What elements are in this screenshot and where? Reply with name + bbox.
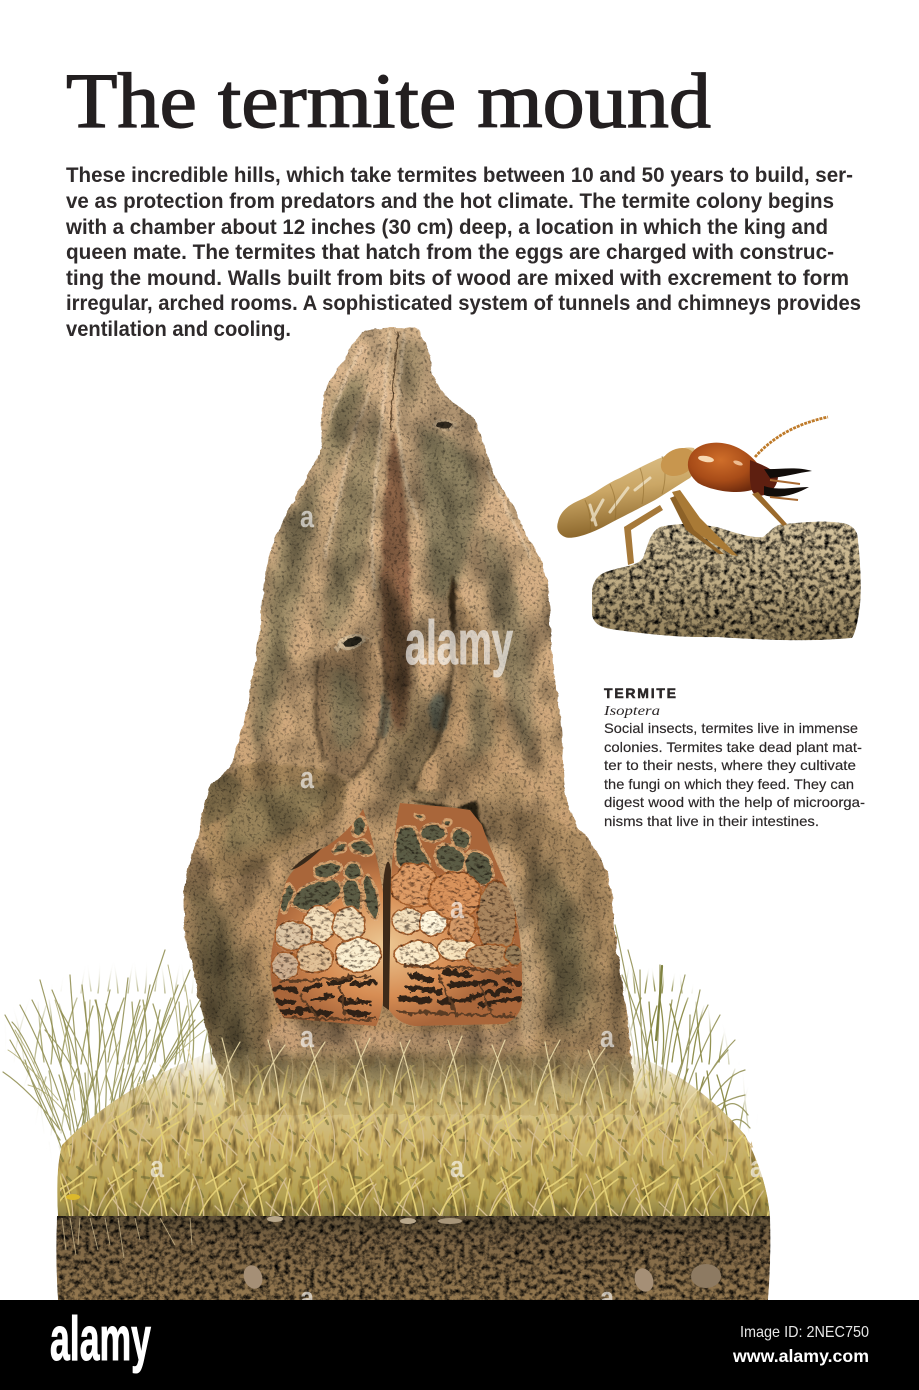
ridge highlights: [324, 331, 530, 590]
upper fungus cells: [278, 814, 499, 921]
stones: [240, 1216, 721, 1294]
thorax: [656, 443, 700, 481]
abdomen: [557, 447, 697, 538]
stock watermarks: a: [300, 1280, 315, 1315]
front leg: [752, 492, 787, 526]
middle cream cells: [271, 863, 523, 980]
palps: [770, 480, 800, 500]
site url: www.alamy.com: [732, 1346, 869, 1366]
alamy logo: alamy: [50, 1305, 151, 1374]
termite caption: digest wood with the help of microorga-: [604, 794, 865, 810]
intro paragraph: These incredible hills, which take termites between 10 and 50 years to build, ser-: [66, 163, 853, 187]
title: The termite mound: [66, 57, 711, 144]
termite illustration: [557, 417, 861, 640]
chamber gap: [291, 848, 322, 870]
intro paragraph: with a chamber about 12 inches (30 cm) deep, a location in which the king and: [65, 215, 828, 239]
termite caption: nisms that live in their intestines.: [604, 813, 819, 829]
mound body: [170, 320, 650, 1120]
chimney columns: [317, 419, 529, 818]
termite caption: Social insects, termites live in immense: [604, 720, 858, 736]
stock watermarks: a: [300, 1019, 315, 1054]
cross-section of nest chambers: [270, 803, 522, 1026]
termite caption: the fungi on which they feed. They can: [604, 776, 854, 792]
central valley: [381, 430, 411, 730]
green-grey mottling: [374, 694, 390, 738]
intro paragraph: [65, 163, 861, 341]
stock watermarks: a: [450, 1149, 465, 1184]
black slit: [449, 575, 457, 632]
grass blades: [60, 1055, 770, 1217]
jaw base: [750, 460, 778, 496]
antenna: [755, 417, 828, 457]
termite mound: [170, 320, 650, 1120]
termite caption: colonies. Termites take dead plant mat-: [604, 739, 862, 755]
intro paragraph: ventilation and cooling.: [66, 317, 291, 341]
termite caption: Isoptera: [603, 704, 660, 719]
lower dark galleries: [275, 965, 520, 1020]
stock watermarks: a: [300, 760, 315, 795]
mound shading: [254, 331, 533, 810]
stock watermarks: alamy: [405, 609, 513, 678]
tall grass behind the mound: [0, 900, 800, 1190]
stock watermarks: a: [150, 1149, 165, 1184]
termite caption: TERMITE: [604, 685, 676, 701]
intro paragraph: queen mate. The termites that hatch from the eggs are charged with construc-: [66, 240, 834, 264]
head highlights: [698, 455, 743, 467]
termite caption: [603, 685, 865, 829]
stock watermarks: a: [600, 1280, 615, 1315]
roots: [62, 1218, 192, 1258]
icon: chimney openings: [336, 419, 457, 651]
intro paragraph: irregular, arched rooms. A sophisticated system of tunnels and chimneys provides: [66, 291, 861, 315]
stock watermarks: a: [300, 499, 315, 534]
stock watermarks: a: [450, 890, 465, 925]
footer bar: [0, 1300, 919, 1390]
nest fragment: [592, 521, 861, 640]
mid legs: [672, 490, 738, 556]
stock watermarks: a: [750, 1149, 765, 1184]
mandibles: [764, 468, 812, 497]
termite caption: ter to their nests, where they cultivate: [604, 757, 856, 773]
abdomen markings: [585, 456, 665, 532]
rear leg: [624, 505, 663, 565]
dark overhang: [410, 797, 490, 842]
grass band: [57, 1036, 770, 1217]
intro paragraph: ve as protection from predators and the hot climate. The termite colony begins: [66, 189, 834, 213]
head: [688, 443, 761, 492]
stock watermarks: [150, 499, 765, 1315]
soil block: [56, 1216, 770, 1300]
stock watermarks: a: [600, 1019, 615, 1054]
intro paragraph: ting the mound. Walls built from bits of wood are mixed with excrement to form: [66, 266, 849, 290]
lower bulges: [189, 762, 640, 1115]
icon: yellow flower: [66, 1194, 80, 1200]
central split: [383, 862, 391, 1010]
image id: Image ID: 2NEC750: [740, 1324, 869, 1341]
